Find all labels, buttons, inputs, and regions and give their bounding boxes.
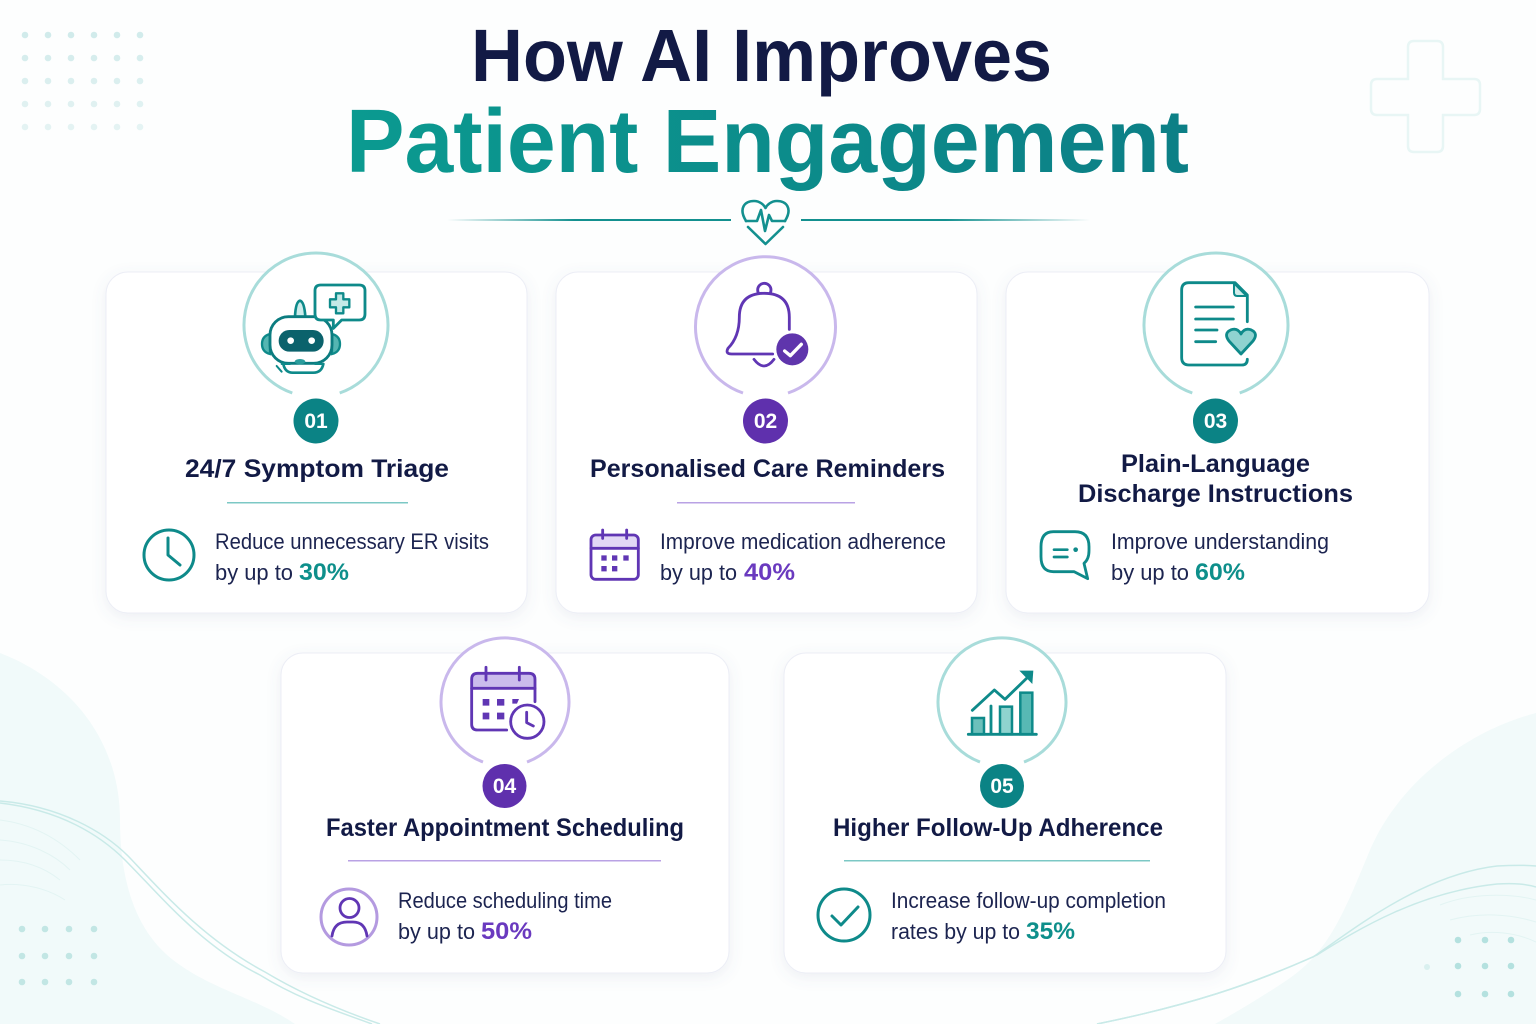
divider (348, 860, 661, 862)
text: stat: 50% (481, 918, 532, 945)
icon: heart with pulse (742, 201, 789, 244)
text: stat: by up to (660, 560, 737, 585)
icon ring (441, 638, 569, 762)
background blob: bottom left (0, 653, 295, 1024)
text: stat: Increase follow-up completion (891, 888, 1166, 913)
number badge 05: 05 (990, 775, 1014, 798)
heading (1078, 450, 1353, 508)
text: stat: 60% (1195, 559, 1245, 586)
number badge 05 (980, 764, 1024, 808)
text: stat: Improve understanding (1111, 529, 1329, 554)
background blob: bottom right (1215, 713, 1536, 1024)
number badge 04 (482, 764, 526, 808)
title (346, 14, 1189, 192)
icon: chat bubble (1041, 532, 1089, 579)
text: stat: by up to (1111, 560, 1189, 585)
number badge 02 (743, 398, 788, 444)
text: stat: 35% (1026, 918, 1075, 945)
text: stat: rates by up to (891, 919, 1020, 944)
icon: robot with speech bubble (262, 285, 365, 373)
dot grid: bottom left (19, 926, 97, 985)
number badge 03 (1193, 398, 1238, 444)
icon: clock (144, 530, 194, 580)
heading: 24/7 Symptom Triage (185, 455, 449, 483)
icon ring (938, 638, 1066, 762)
heart divider (447, 201, 1090, 244)
number badge 01 (294, 398, 338, 444)
icon: calendar with clock (472, 667, 544, 738)
heading: Discharge Instructions (1078, 480, 1353, 508)
background waves: bottom right (1097, 865, 1536, 1024)
heading: Personalised Care Reminders (590, 455, 945, 483)
icon: rising bar chart (968, 671, 1036, 734)
heading: Faster Appointment Scheduling (326, 814, 684, 842)
title line 2: Patient Engagement (346, 92, 1189, 192)
panel: card 03 discharge instructions (1006, 253, 1429, 613)
number badge 02: 02 (754, 410, 777, 433)
number badge 04: 04 (493, 775, 516, 798)
panel: card 02 care reminders (556, 257, 977, 613)
dot grid: bottom right (1424, 937, 1514, 997)
icon: document with heart (1182, 283, 1255, 365)
dot grid: top left (22, 32, 143, 130)
panel: card 04 appointment scheduling (281, 638, 729, 973)
divider (677, 502, 855, 504)
text: stat: 30% (299, 559, 349, 586)
text: stat (891, 888, 1166, 945)
text: stat: by up to (398, 919, 475, 944)
number badge 03: 03 (1204, 410, 1227, 433)
title line 1: How AI Improves (471, 14, 1052, 97)
divider (227, 502, 408, 504)
text: stat: Improve medication adherence (660, 529, 946, 554)
heading: Plain-Language (1121, 450, 1310, 478)
icon ring (244, 253, 388, 393)
background waves: bottom left (0, 801, 380, 1024)
icon: person (321, 889, 377, 945)
text: stat (660, 529, 946, 586)
text: stat: Reduce unnecessary ER visits (215, 529, 489, 554)
icon: check circle (818, 889, 870, 941)
text: stat: Reduce scheduling time (398, 888, 612, 913)
panel: card 01 symptom triage (106, 253, 527, 613)
text: stat (215, 529, 489, 586)
icon: calendar (591, 530, 638, 579)
text: stat (1111, 529, 1329, 586)
text: stat (398, 888, 612, 945)
icon ring (696, 257, 836, 393)
icon: bell with check (727, 283, 808, 366)
number badge 01: 01 (304, 410, 328, 433)
divider (844, 860, 1150, 862)
text: stat: by up to (215, 560, 293, 585)
panel: card 05 follow-up adherence (784, 638, 1226, 973)
text: stat: 40% (744, 559, 795, 586)
icon ring (1144, 253, 1288, 393)
plus outline: top right (1371, 41, 1480, 152)
heading: Higher Follow-Up Adherence (833, 814, 1163, 842)
